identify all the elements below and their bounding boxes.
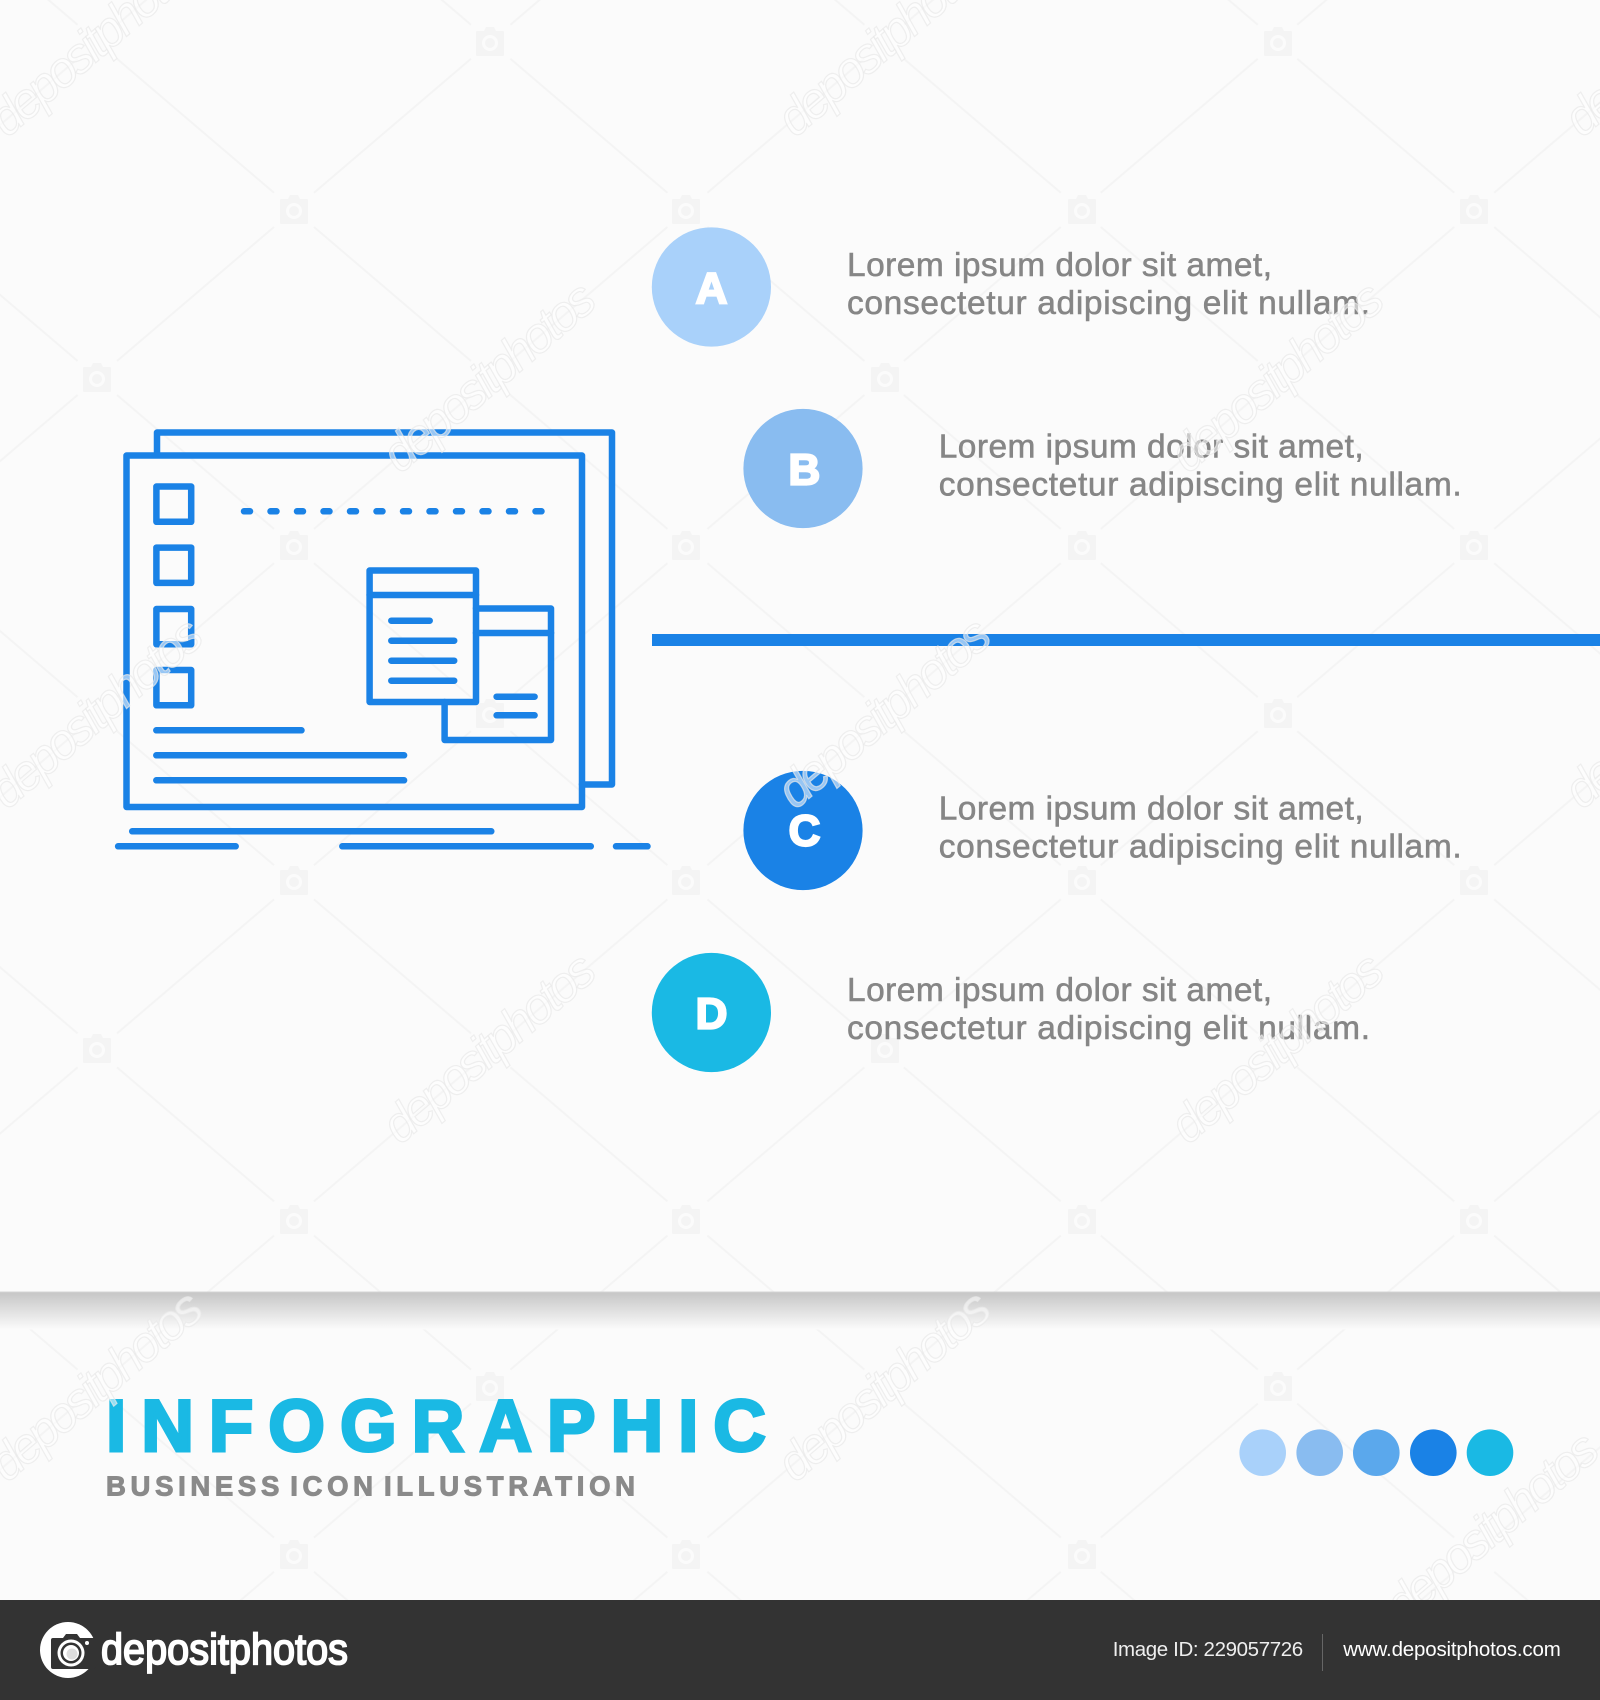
text: depositphotos — [1159, 270, 1394, 483]
text: depositphotos — [1159, 941, 1394, 1154]
text D — [847, 972, 1370, 1047]
text B: consectetur adipiscing elit nullam. — [939, 466, 1462, 504]
icon: application windows — [118, 432, 648, 846]
subtitle: BUSINESS ICON ILLUSTRATION — [106, 1470, 635, 1502]
item B — [743, 409, 1462, 528]
circle A: A — [696, 264, 727, 313]
text: depositphotos — [766, 606, 1001, 819]
depositphotos logo: depositphotos — [101, 1625, 348, 1674]
colour dots — [1239, 1429, 1513, 1476]
icon: camera badge — [40, 1622, 96, 1678]
text B: Lorem ipsum dolor sit amet, — [939, 428, 1364, 466]
text C — [939, 790, 1462, 866]
circle A — [652, 227, 771, 347]
text D: Lorem ipsum dolor sit amet, — [847, 972, 1272, 1009]
depositphotos logo — [40, 1622, 348, 1678]
divider band shadow — [0, 1292, 1600, 1330]
website: www.depositphotos.com — [1342, 1638, 1561, 1661]
small window back — [445, 608, 551, 740]
title: INFOGRAPHIC — [106, 1386, 766, 1467]
connector line — [652, 634, 1600, 646]
item A — [652, 227, 1370, 347]
text A: consectetur adipiscing elit nullam. — [847, 285, 1370, 322]
item C — [743, 771, 1462, 890]
back window — [157, 432, 612, 784]
circle D: D — [696, 990, 727, 1038]
text D: consectetur adipiscing elit nullam. — [847, 1010, 1370, 1047]
text C: consectetur adipiscing elit nullam. — [939, 828, 1462, 866]
text: depositphotos — [371, 941, 606, 1154]
image id: Image ID: 229057726 — [1113, 1638, 1303, 1661]
front window — [126, 456, 582, 807]
text A: Lorem ipsum dolor sit amet, — [847, 247, 1272, 284]
text A — [847, 247, 1370, 322]
small window front — [370, 570, 476, 702]
text: depositphotos — [766, 1279, 1001, 1492]
circle C — [743, 771, 863, 890]
text C: Lorem ipsum dolor sit amet, — [939, 790, 1364, 828]
circle C: C — [789, 806, 820, 856]
dotted line — [244, 508, 542, 515]
circle B — [743, 409, 863, 528]
circle B: B — [789, 446, 820, 494]
item D — [652, 953, 1370, 1072]
text B — [939, 428, 1462, 504]
baseline strokes — [118, 831, 648, 846]
text: depositphotos — [371, 270, 606, 483]
footer bar — [0, 1600, 1600, 1700]
window text lines — [156, 730, 404, 780]
checkbox list — [156, 486, 191, 705]
circle D — [652, 953, 771, 1072]
